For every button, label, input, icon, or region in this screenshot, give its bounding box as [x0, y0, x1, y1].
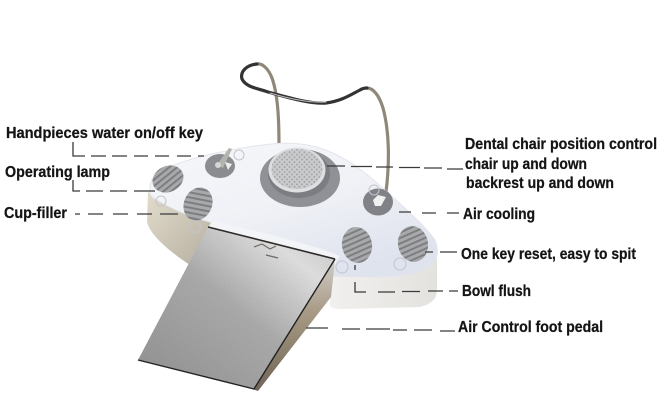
water switch [205, 148, 235, 178]
label: bowl flush: Bowl flush [462, 283, 531, 300]
leader: one key reset [425, 251, 457, 253]
pedal [138, 221, 340, 391]
label: cup-filler: Cup-filler [4, 205, 67, 222]
leader: cup-filler [75, 213, 178, 215]
pedal underside [252, 260, 335, 391]
dial control [260, 148, 340, 207]
button: one key reset [395, 224, 431, 264]
label: handpieces water on/off key: Handpieces water on/off key [6, 125, 203, 142]
top surface [150, 143, 437, 277]
air cooling button [363, 188, 393, 216]
leader: handpieces [73, 142, 204, 156]
pedal hinge [208, 221, 340, 261]
icon rings [156, 150, 406, 273]
leader: air control pedal [306, 328, 455, 331]
leader: dental chair [327, 166, 463, 169]
label: air cooling: Air cooling [463, 206, 535, 223]
leader: operating lamp [73, 180, 155, 191]
button: bowl flush [339, 225, 375, 265]
label: operating lamp: Operating lamp [5, 164, 110, 181]
label: one key reset: One key reset, easy to spit [461, 246, 637, 263]
label: air control foot pedal: Air Control foot pedal [458, 319, 603, 336]
wire handle [242, 64, 388, 192]
foot control device [138, 64, 437, 391]
button: cup-filler [178, 183, 218, 225]
leader lines [73, 142, 463, 331]
leader: air cooling [399, 212, 459, 213]
leader: bowl flush [355, 265, 458, 292]
pedal plate [138, 227, 335, 389]
label: chair up and down: chair up and down [465, 156, 587, 173]
label: backrest up and down: backrest up and down [466, 175, 614, 192]
right side wall [330, 258, 437, 309]
button: operating lamp [148, 160, 188, 198]
pedal marking [254, 244, 278, 258]
left side wall [147, 192, 215, 265]
